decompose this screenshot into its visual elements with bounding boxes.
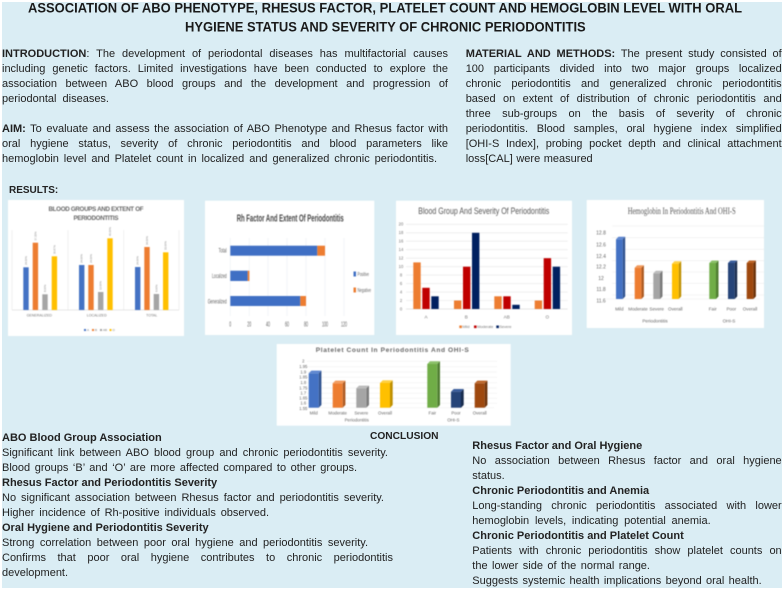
chart: blood groups and extent of periodontitis: BLOOD GROUPS AND EXTENT OF xyxy=(48,206,144,213)
chart: blood group and severity of periodontitis: 2 xyxy=(400,298,403,303)
chart: blood group and severity of periodontitis: 6 xyxy=(400,281,403,286)
text block: material and methods: three sub-groups on the basis of severity of chronic xyxy=(466,108,782,120)
text block: conclusion right column: Patients with chronic periodontitis show platelet counts on xyxy=(472,545,782,557)
chart: Rh factor and extent of periodontitis: Positive xyxy=(358,272,369,278)
chart: blood groups and extent of periodontitis: 24.00% xyxy=(136,256,140,265)
chart: platelet count in periodontitis and OHI-S: 1.95 xyxy=(299,364,308,369)
text block: material and methods: chronic periodontitis and generalized chronic periodontitis xyxy=(466,78,782,90)
chart: blood groups and extent of periodontitis: A xyxy=(87,328,89,332)
chart: platelet count in periodontitis and OHI-S: Moderate xyxy=(328,411,348,416)
chart: blood groups and extent of periodontitis: 34.00% xyxy=(145,236,149,245)
chart: hemoglobin in periodontitis and OHI-S: 12.2 xyxy=(596,264,606,270)
chart: blood groups and extent of periodontitis: 30.67% xyxy=(52,245,56,254)
chart: Rh factor and extent of periodontitis: 80 xyxy=(304,322,308,328)
chart: platelet count in periodontitis and OHI-S: Mild xyxy=(310,411,318,416)
chart: blood group and severity of periodontitis: 8 xyxy=(400,272,403,278)
chart: blood group and severity of periodontitis: 16 xyxy=(399,239,404,244)
text block: conclusion right column: status. xyxy=(472,470,505,482)
chart: blood group and severity of periodontitis: Moderate xyxy=(477,325,493,329)
text block: conclusion right column: Chronic Periodontitis and Anemia xyxy=(472,485,649,497)
chart: Rh factor and extent of periodontitis: 60 xyxy=(285,322,289,328)
text block: conclusion left column xyxy=(2,432,393,579)
chart: Rh factor and extent of periodontitis: 120 xyxy=(341,322,347,328)
chart: platelet count in periodontitis and OHI-S: 1.7 xyxy=(300,391,307,396)
text block: conclusion right column: hemoglobin levels, indicating potential anemia. xyxy=(472,515,711,527)
text block: conclusion left column: Oral Hygiene and Periodontitis Severity xyxy=(2,522,209,534)
text block: material and methods: [OHI-S Index], probing pocket depth and clinical attachment xyxy=(466,138,782,150)
chart: platelet count in periodontitis and OHI-S: 1.65 xyxy=(299,396,308,401)
text block: conclusion left column: Rhesus Factor and Periodontitis Severity xyxy=(2,477,217,489)
text block: aim: oral hygiene status, severity of chronic periodontitis and blood parameters like xyxy=(2,138,448,150)
chart: blood groups and extent of periodontitis: GENERALIZED xyxy=(27,314,52,318)
text block: material and methods: MATERIAL AND METHODS: The present study consisted of xyxy=(466,48,782,60)
chart: Rh factor and extent of periodontitis: 100 xyxy=(322,322,328,328)
text block: conclusion left column: ABO Blood Group Association xyxy=(2,432,162,444)
text block: introduction xyxy=(2,48,448,105)
chart: Rh factor and extent of periodontitis xyxy=(205,201,374,335)
chart: blood groups and extent of periodontitis: B xyxy=(95,328,97,332)
chart: blood groups and extent of periodontitis: 8.00% xyxy=(43,284,47,292)
chart: blood group and severity of periodontitis: 0 xyxy=(400,306,403,311)
chart: platelet count in periodontitis and OHI-S: 1.85 xyxy=(299,375,308,380)
chart: blood groups and extent of periodontitis: 9.00% xyxy=(154,284,158,292)
chart: blood group and severity of periodontitis: 10 xyxy=(399,264,404,269)
text block: aim: hemoglobin level and Platelet count in localized and generalized chronic periodontitis. xyxy=(2,153,437,165)
text block: conclusion right column: No association between Rhesus factor and oral hygiene xyxy=(472,455,782,467)
chart: Rh factor and extent of periodontitis: 40 xyxy=(266,322,270,328)
text block: aim xyxy=(2,123,448,165)
text block: introduction: including genetic factors. Limited investigations have been conducted to explore the xyxy=(2,63,448,75)
chart: blood groups and extent of periodontitis xyxy=(8,200,184,336)
chart: blood group and severity of periodontitis: 18 xyxy=(399,230,404,235)
heading: results: RESULTS: xyxy=(9,185,58,196)
chart: hemoglobin in periodontitis and OHI-S: Overall xyxy=(668,306,683,311)
text block: conclusion right column: Chronic Periodontitis and Platelet Count xyxy=(472,530,684,542)
text block: material and methods: periodontitis. Blood samples, oral hygiene index simplified xyxy=(466,123,782,135)
title: HYGIENE STATUS AND SEVERITY OF CHRONIC PERIODONTITIS xyxy=(185,20,586,35)
text block: introduction: INTRODUCTION: The development of periodontal diseases has multifactorial causes xyxy=(2,48,448,60)
chart: blood group and severity of periodontitis: 20 xyxy=(399,222,404,227)
chart: blood group and severity of periodontitis: 14 xyxy=(399,247,404,252)
text block: material and methods xyxy=(466,48,782,165)
text block: material and methods: based on extent of distribution of chronic periodontitis and xyxy=(466,93,782,105)
chart: Rh factor and extent of periodontitis: 0 xyxy=(229,322,231,328)
chart: platelet count in periodontitis and OHI-S: 1.75 xyxy=(299,385,308,390)
text block: conclusion right column: Suggests systemic health implications beyond oral health. xyxy=(472,575,762,587)
chart: blood groups and extent of periodontitis: PERIODONTITIS xyxy=(74,215,118,222)
chart: blood group and severity of periodontitis: Blood Group And Severity Of Periodontitis xyxy=(418,206,549,217)
chart: platelet count in periodontitis and OHI-S: Overall xyxy=(378,411,392,416)
chart: Rh factor and extent of periodontitis: Localized xyxy=(212,273,227,280)
chart: platelet count in periodontitis and OHI-S: 1.9 xyxy=(300,369,307,374)
chart: Rh factor and extent of periodontitis: Rh Factor And Extent Of Periodontitis xyxy=(237,212,344,224)
chart: platelet count in periodontitis and OHI-S: Periodontitis xyxy=(345,418,370,423)
chart: hemoglobin in periodontitis and OHI-S: Fair xyxy=(709,306,717,311)
chart: blood group and severity of periodontitis xyxy=(396,201,572,335)
text block: conclusion right column: Rhesus Factor and Oral Hygiene xyxy=(472,440,642,452)
chart: hemoglobin in periodontitis and OHI-S: Hemoglobin In Periodontitis And OHI-S xyxy=(628,206,736,216)
chart: platelet count in periodontitis and OHI-S xyxy=(277,344,511,426)
chart: hemoglobin in periodontitis and OHI-S: OHI-S xyxy=(723,318,735,323)
chart: platelet count in periodontitis and OHI-S: Fair xyxy=(429,411,437,416)
text block: conclusion left column: No significant association between Rhesus factor and periodontitis severity. xyxy=(2,492,384,504)
text block: introduction: periodontal diseases. xyxy=(2,93,109,105)
chart: platelet count in periodontitis and OHI-S: Poor xyxy=(451,411,461,416)
chart: blood groups and extent of periodontitis: LOCALIZED xyxy=(87,314,107,318)
chart: Rh factor and extent of periodontitis: Total xyxy=(218,247,227,254)
chart: hemoglobin in periodontitis and OHI-S: Periodontitis xyxy=(642,318,668,323)
chart: hemoglobin in periodontitis and OHI-S: 12.8 xyxy=(596,231,606,237)
chart: hemoglobin in periodontitis and OHI-S: 11.8 xyxy=(596,287,606,293)
chart: hemoglobin in periodontitis and OHI-S: Severe xyxy=(649,306,664,311)
chart: blood group and severity of periodontitis: 4 xyxy=(400,290,403,294)
chart: Rh factor and extent of periodontitis: 20 xyxy=(247,322,251,328)
heading: conclusion: CONCLUSION xyxy=(370,431,438,442)
text block: conclusion left column: Significant link between ABO blood group and chronic periodontitis severity. xyxy=(2,447,388,459)
chart: hemoglobin in periodontitis and OHI-S: Overall xyxy=(743,306,757,311)
text block: material and methods: loss[CAL] were measured xyxy=(466,153,593,165)
chart: blood groups and extent of periodontitis: 33.00% xyxy=(164,241,168,250)
chart: blood groups and extent of periodontitis: AB xyxy=(103,328,107,332)
chart: platelet count in periodontitis and OHI-S: Overall xyxy=(473,411,487,416)
text block: aim: AIM: To evaluate and assess the association of ABO Phenotype and Rhesus factor with xyxy=(2,123,448,135)
chart: hemoglobin in periodontitis and OHI-S xyxy=(587,200,764,328)
chart: Rh factor and extent of periodontitis: Negative xyxy=(358,288,371,294)
chart: platelet count in periodontitis and OHI-S: 1.6 xyxy=(300,401,307,406)
chart: blood groups and extent of periodontitis: 37.33% xyxy=(33,231,37,240)
text block: conclusion right column: the lower side of the normal range. xyxy=(472,560,650,572)
chart: platelet count in periodontitis and OHI-S: 1.8 xyxy=(300,380,307,385)
text block: introduction: association between ABO blood groups and the development and progression of xyxy=(2,78,448,90)
text block: conclusion left column: Higher incidence of Rh-positive individuals observed. xyxy=(2,507,269,519)
chart: blood groups and extent of periodontitis: O xyxy=(112,328,116,332)
chart: hemoglobin in periodontitis and OHI-S: 12 xyxy=(598,276,604,282)
chart: hemoglobin in periodontitis and OHI-S: 12.6 xyxy=(596,243,606,249)
chart: hemoglobin in periodontitis and OHI-S: Mild xyxy=(615,306,624,311)
title: ASSOCIATION OF ABO PHENOTYPE, RHESUS FACTOR, PLATELET COUNT AND HEMOGLOBIN LEVEL WITH ORAL xyxy=(28,0,742,16)
chart: blood group and severity of periodontitis: AB xyxy=(504,314,510,319)
text block: material and methods: 100 participants divided into two major groups localized xyxy=(466,63,782,75)
chart: blood groups and extent of periodontitis: 24.00% xyxy=(24,256,28,265)
chart: hemoglobin in periodontitis and OHI-S: Poor xyxy=(726,306,737,311)
chart: Rh factor and extent of periodontitis: Generalized xyxy=(208,298,227,305)
text block: conclusion left column: Confirms that poor oral hygiene contributes to chronic periodontitis xyxy=(2,552,393,564)
chart: blood group and severity of periodontitis: B xyxy=(465,314,468,319)
chart: blood groups and extent of periodontitis: 24.00% xyxy=(80,254,84,263)
chart: blood group and severity of periodontitis: Severe xyxy=(500,325,512,329)
chart: platelet count in periodontitis and OHI-S: 2 xyxy=(302,359,305,364)
chart: hemoglobin in periodontitis and OHI-S: 11.6 xyxy=(596,299,606,305)
text block: conclusion left column: Strong correlation between poor oral hygiene and periodontitis severity. xyxy=(2,537,368,549)
chart: platelet count in periodontitis and OHI-S: 1.55 xyxy=(299,406,308,411)
chart: blood group and severity of periodontitis: O xyxy=(546,314,550,319)
text block: conclusion left column: development. xyxy=(2,567,68,579)
chart: hemoglobin in periodontitis and OHI-S: Moderate xyxy=(628,306,648,311)
chart: blood groups and extent of periodontitis: 40.00% xyxy=(108,227,112,236)
chart: blood group and severity of periodontitis: A xyxy=(424,314,428,319)
chart: platelet count in periodontitis and OHI-S: Platelet Count In Periodontitis And OHI-S xyxy=(316,347,469,354)
charts layer xyxy=(8,200,764,426)
chart: hemoglobin in periodontitis and OHI-S: 12.4 xyxy=(596,254,606,260)
chart: blood group and severity of periodontitis: Mild xyxy=(462,325,469,329)
chart: platelet count in periodontitis and OHI-S: Severe xyxy=(354,411,369,416)
chart: blood group and severity of periodontitis: 12 xyxy=(399,256,404,261)
title xyxy=(28,0,742,35)
chart: blood groups and extent of periodontitis: 12.00% xyxy=(99,281,103,290)
text block: conclusion left column: Blood groups ‘B’ and ‘O’ are more affected compared to other groups. xyxy=(2,462,357,474)
chart: blood groups and extent of periodontitis: TOTAL xyxy=(146,314,157,318)
text block: conclusion right column xyxy=(472,440,782,587)
chart: platelet count in periodontitis and OHI-S: OHI-S xyxy=(447,418,459,423)
text block: conclusion right column: Long-standing chronic periodontitis associated with lower xyxy=(472,500,782,512)
chart: blood groups and extent of periodontitis: 24.00% xyxy=(89,254,93,263)
